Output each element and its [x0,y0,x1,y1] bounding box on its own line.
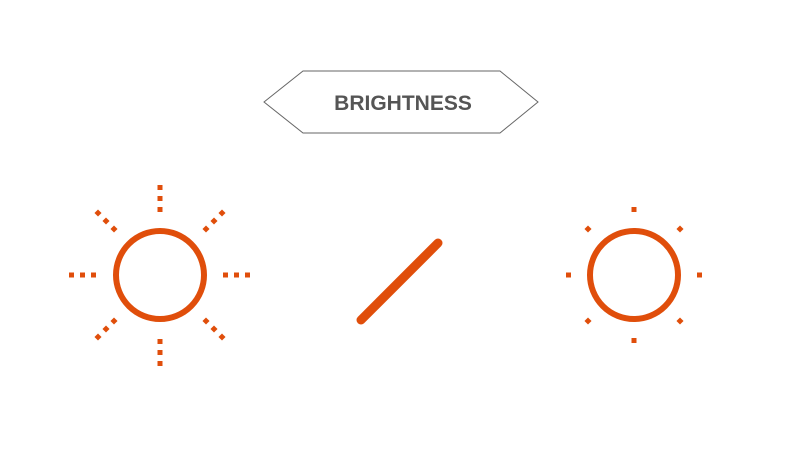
title text: BRIGHTNESS [334,92,472,115]
icon: bright sun [69,185,250,366]
slider line [361,243,438,320]
icon: dim sun [566,207,702,343]
title badge [264,71,538,133]
